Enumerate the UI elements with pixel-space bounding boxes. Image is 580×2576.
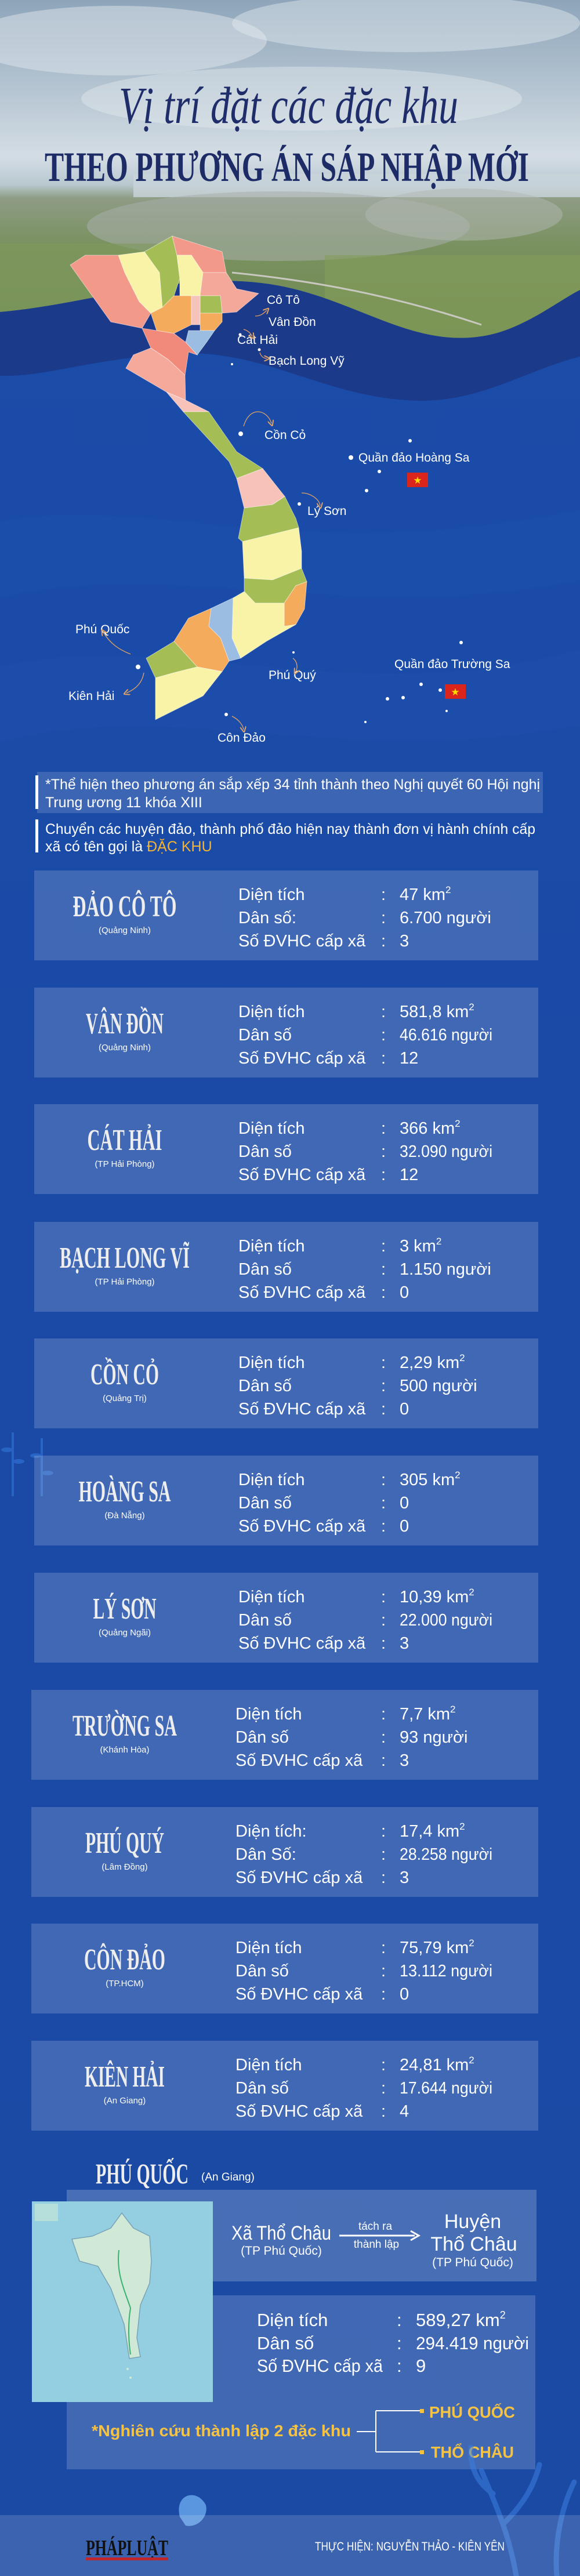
card: Cồn Cỏ: Diện tích — [238, 1354, 304, 1372]
card: Vân Đồn: : — [381, 1049, 386, 1068]
card: Lý Sơn: (Quảng Ngãi) — [99, 1628, 151, 1638]
decoration: coral left — [1, 1432, 53, 1496]
card: Bạch Long Vĩ: (TP Hải Phòng) — [95, 1277, 155, 1287]
card: Lý Sơn: LÝ SƠN — [93, 1592, 157, 1626]
Phú Quốc stats box: 2 — [500, 2309, 506, 2321]
Phú Quốc transfer box: Thổ Châu — [430, 2233, 517, 2255]
card: Kiên Hải: 17.644 người — [400, 2079, 492, 2098]
card: Côn Đảo: Dân số — [235, 1962, 289, 1980]
card: Trường Sa: : — [381, 1751, 386, 1770]
card: Hoàng Sa: (Đà Nẵng) — [104, 1511, 145, 1521]
Phú Quốc stats box: Diện tích — [257, 2310, 328, 2330]
logo: Pháp Luật — [86, 2536, 168, 2560]
card: Kiên Hải: (An Giang) — [104, 2096, 146, 2106]
footer band — [0, 2515, 580, 2576]
card: Côn Đảo: Số ĐVHC cấp xã — [235, 1985, 363, 2004]
callout: research 2 special zones: PHÚ QUỐC — [429, 2403, 515, 2421]
card: Cát Hải: 2 — [455, 1118, 461, 1129]
card: Cồn Cỏ: CỒN CỎ — [90, 1356, 159, 1391]
card: Hoàng Sa: HOÀNG SA — [79, 1475, 171, 1508]
islands — [136, 333, 463, 723]
Phú Quốc transfer box: (TP Phú Quốc) — [432, 2256, 513, 2269]
map labels: Kiên Hải — [68, 690, 114, 703]
card: Bạch Long Vĩ: 3 km — [400, 1237, 436, 1256]
card: Bạch Long Vĩ: BẠCH LONG VĨ — [60, 1241, 190, 1275]
card: Bạch Long Vĩ: 2 — [436, 1236, 441, 1247]
card: Phú Quý: 3 — [400, 1868, 409, 1887]
card: Hoàng Sa: 0 — [400, 1494, 409, 1512]
card: Bạch Long Vĩ: Dân số — [238, 1260, 292, 1279]
card: Côn Đảo — [31, 1924, 538, 2013]
card: Đảo Cô Tô: 6.700 người — [400, 909, 491, 927]
card: Đảo Cô Tô: Dân số: — [238, 909, 296, 927]
card: Bạch Long Vĩ: 1.150 người — [400, 1260, 491, 1279]
card: Phú Quý: Dân Số: — [235, 1845, 296, 1864]
Phú Quốc transfer box: Xã Thổ Châu — [231, 2222, 331, 2244]
card: Bạch Long Vĩ: Số ĐVHC cấp xã — [238, 1283, 366, 1302]
card: Hoàng Sa: Dân số — [238, 1494, 292, 1512]
callout: research 2 special zones — [92, 2403, 515, 2461]
card: Kiên Hải: 24,81 km — [400, 2056, 469, 2074]
card: Đảo Cô Tô: : — [381, 932, 386, 950]
map labels: Lý Sơn — [307, 505, 346, 518]
card: Trường Sa: TRƯỜNG SA — [72, 1709, 177, 1743]
card: Lý Sơn: 3 — [400, 1634, 409, 1653]
card: Phú Quý — [31, 1807, 538, 1897]
card: Cồn Cỏ: : — [381, 1377, 386, 1395]
card: Cồn Cỏ — [34, 1338, 538, 1428]
Phú Quốc heading: (An Giang) — [201, 2171, 255, 2183]
card: Phú Quý: : — [381, 1868, 386, 1887]
card: Kiên Hải — [31, 2041, 538, 2131]
Phú Quốc transfer box — [67, 2190, 536, 2281]
note 2: xã có tên gọi là ĐẶC KHU — [45, 838, 212, 855]
map labels: Phú Quý — [269, 669, 316, 682]
map labels: Quần đảo Hoàng Sa — [358, 451, 470, 465]
Phú Quốc transfer box: tách ra — [358, 2221, 392, 2233]
card: Trường Sa: Số ĐVHC cấp xã — [235, 1751, 363, 1770]
note 1: Trung ương 11 khóa XIII — [45, 794, 202, 811]
card: Bạch Long Vĩ — [34, 1222, 538, 1312]
Phú Quốc transfer box: thành lập — [354, 2238, 399, 2251]
Phú Quốc transfer box: Huyện — [444, 2211, 501, 2233]
card: Vân Đồn: 581,8 km — [400, 1003, 469, 1021]
card: Đảo Cô Tô — [34, 870, 538, 960]
card: Lý Sơn: : — [381, 1611, 386, 1630]
card: Phú Quý: Số ĐVHC cấp xã — [235, 1868, 363, 1887]
decoration: shell — [179, 2495, 206, 2526]
logo: Pháp Luật: PHÁPLUẬT — [86, 2536, 168, 2560]
card: Cát Hải: : — [381, 1166, 386, 1184]
card: Trường Sa: Diện tích — [235, 1705, 302, 1724]
card: Phú Quý: Diện tích: — [235, 1822, 306, 1841]
card: Bạch Long Vĩ: : — [381, 1283, 386, 1302]
card: Côn Đảo: : — [381, 1939, 386, 1957]
card: Kiên Hải: : — [381, 2056, 386, 2074]
card: Côn Đảo: 0 — [400, 1985, 409, 2004]
card: Đảo Cô Tô: Số ĐVHC cấp xã — [238, 932, 366, 950]
card: Vân Đồn: Diện tích — [238, 1003, 304, 1021]
card: Cát Hải: 12 — [400, 1166, 418, 1184]
card: Côn Đảo: 2 — [469, 1938, 474, 1949]
Phú Quốc stats box: 294.419 người — [416, 2333, 529, 2353]
card: Cồn Cỏ: 500 người — [400, 1377, 477, 1395]
map labels: Bạch Long Vỹ — [269, 354, 345, 368]
card: Kiên Hải: : — [381, 2079, 386, 2098]
Phú Quốc stats box: Số ĐVHC cấp xã — [257, 2356, 383, 2376]
card: Phú Quý: : — [381, 1822, 386, 1841]
note 1: *Thể hiện theo phương án sắp xếp 34 tỉnh thành theo Nghị quyết 60 Hội nghị — [45, 776, 540, 793]
card: Đảo Cô Tô: ĐẢO CÔ TÔ — [73, 890, 176, 923]
card: Phú Quý: 17,4 km — [400, 1822, 459, 1841]
decoration: coral right bottom — [471, 2447, 574, 2576]
card: Côn Đảo: (TP.HCM) — [106, 1979, 144, 1989]
card: Cồn Cỏ: : — [381, 1354, 386, 1372]
card: Kiên Hải: : — [381, 2102, 386, 2121]
Phú Quốc transfer box: (TP Phú Quốc) — [241, 2244, 322, 2258]
card: Lý Sơn: : — [381, 1634, 386, 1653]
card: Kiên Hải: 4 — [400, 2102, 409, 2121]
card: Kiên Hải: Diện tích — [235, 2056, 302, 2074]
card: Cồn Cỏ: (Quảng Trị) — [103, 1394, 147, 1403]
card: Kiên Hải: KIÊN HẢI — [85, 2060, 165, 2094]
card: Đảo Cô Tô: Diện tích — [238, 886, 304, 904]
map labels — [68, 293, 510, 745]
title — [45, 77, 529, 190]
card: Hoàng Sa: : — [381, 1471, 386, 1489]
card: Côn Đảo: : — [381, 1985, 386, 2004]
card: Côn Đảo: CÔN ĐẢO — [84, 1943, 165, 1976]
card: Vân Đồn: : — [381, 1026, 386, 1044]
map labels: Cát Hải — [237, 333, 278, 347]
card: Bạch Long Vĩ: 0 — [400, 1283, 409, 1302]
card: Hoàng Sa: : — [381, 1517, 386, 1536]
card: Lý Sơn: : — [381, 1588, 386, 1606]
card: Cồn Cỏ: Dân số — [238, 1377, 292, 1395]
card: Kiên Hải: Số ĐVHC cấp xã — [235, 2102, 363, 2121]
card: Bạch Long Vĩ: : — [381, 1237, 386, 1256]
map labels: Cô Tô — [267, 293, 300, 307]
card: Lý Sơn: Diện tích — [238, 1588, 304, 1606]
callout: research 2 special zones: THỔ CHÂU — [431, 2443, 514, 2461]
card: Côn Đảo: Diện tích — [235, 1939, 302, 1957]
card: Phú Quý: 2 — [459, 1821, 465, 1832]
Phú Quốc stats box: : — [397, 2333, 402, 2353]
card: Hoàng Sa: 2 — [455, 1470, 461, 1481]
map labels: Côn Đảo — [217, 731, 266, 745]
Phú Quốc stats box: 589,27 km — [416, 2310, 500, 2330]
card: Kiên Hải: Dân số — [235, 2079, 289, 2098]
card: Côn Đảo: 13.112 người — [400, 1962, 492, 1980]
card: Côn Đảo: : — [381, 1962, 386, 1980]
callout: research 2 special zones: *Nghiên cứu thành lập 2 đặc khu — [92, 2422, 351, 2440]
card: Lý Sơn: Dân số — [238, 1611, 292, 1630]
card: Vân Đồn: Số ĐVHC cấp xã — [238, 1049, 366, 1068]
card: Vân Đồn: : — [381, 1003, 386, 1021]
card: Vân Đồn: (Quảng Ninh) — [99, 1043, 151, 1053]
card: Lý Sơn: 10,39 km — [400, 1588, 469, 1606]
card: Cồn Cỏ: 2,29 km — [400, 1354, 459, 1372]
card: Cồn Cỏ: : — [381, 1400, 386, 1418]
Phú Quốc map — [32, 2201, 213, 2402]
card: Lý Sơn: 22.000 người — [400, 1611, 492, 1630]
card: Trường Sa: : — [381, 1705, 386, 1724]
map labels: Cồn Cỏ — [264, 429, 306, 442]
card: Đảo Cô Tô: : — [381, 909, 386, 927]
card: Cát Hải: (TP Hải Phòng) — [95, 1159, 155, 1169]
card: Trường Sa — [31, 1690, 538, 1780]
card: Phú Quý: PHÚ QUÝ — [85, 1826, 164, 1860]
Phú Quốc stats box: 9 — [416, 2356, 426, 2376]
card: Lý Sơn: Số ĐVHC cấp xã — [238, 1634, 366, 1653]
card: Cát Hải: : — [381, 1119, 386, 1138]
card: Trường Sa: 3 — [400, 1751, 409, 1770]
card: Cồn Cỏ: 0 — [400, 1400, 409, 1418]
card: Hoàng Sa — [34, 1456, 538, 1545]
map labels: Vân Đồn — [269, 315, 316, 329]
note 1 — [35, 772, 543, 813]
credits: THỰC HIỆN: NGUYỄN THẢO - KIÊN YÊN — [315, 2540, 505, 2553]
card: Cồn Cỏ: 2 — [459, 1352, 465, 1363]
card: Trường Sa: Dân số — [235, 1728, 289, 1747]
card: Trường Sa: 2 — [450, 1704, 456, 1715]
navy wave — [0, 281, 580, 401]
card: Cát Hải: Diện tích — [238, 1119, 304, 1138]
map: Vietnam provinces — [70, 236, 307, 720]
card: Kiên Hải: 2 — [469, 2055, 474, 2066]
card: Hoàng Sa: Số ĐVHC cấp xã — [238, 1517, 366, 1536]
card: Bạch Long Vĩ: : — [381, 1260, 386, 1279]
card: Cát Hải: CÁT HẢI — [87, 1123, 162, 1157]
flags — [407, 473, 466, 699]
Phú Quốc stats box: Dân số — [257, 2333, 314, 2353]
Phú Quốc stats box: : — [397, 2310, 402, 2330]
map labels: Phú Quốc — [75, 623, 129, 636]
card: Vân Đồn — [34, 988, 538, 1077]
card: Hoàng Sa: 305 km — [400, 1471, 455, 1489]
card: Trường Sa: (Khánh Hòa) — [100, 1745, 150, 1755]
arrows — [103, 310, 320, 730]
card: Cát Hải: : — [381, 1142, 386, 1161]
card: Cồn Cỏ: Số ĐVHC cấp xã — [238, 1400, 366, 1418]
card: Phú Quý: 28.258 người — [400, 1845, 492, 1864]
card: Vân Đồn: 46.616 người — [400, 1026, 492, 1044]
card: Đảo Cô Tô: : — [381, 886, 386, 904]
card: Lý Sơn: 2 — [469, 1587, 474, 1598]
card: Đảo Cô Tô: (Quảng Ninh) — [99, 926, 151, 935]
card: Vân Đồn: Dân số — [238, 1026, 292, 1044]
card: Bạch Long Vĩ: Diện tích — [238, 1237, 304, 1256]
card: Cát Hải: Dân số — [238, 1142, 292, 1161]
Phú Quốc heading: PHÚ QUỐC — [96, 2157, 188, 2190]
Phú Quốc stats box — [67, 2295, 535, 2469]
card: Cát Hải — [34, 1104, 538, 1194]
card: Trường Sa: : — [381, 1728, 386, 1747]
card: Vân Đồn: 2 — [469, 1002, 474, 1013]
header photo — [0, 0, 580, 348]
card: Hoàng Sa: : — [381, 1494, 386, 1512]
card: Đảo Cô Tô: 2 — [445, 884, 451, 895]
card: Cát Hải: 366 km — [400, 1119, 455, 1138]
card: Lý Sơn — [34, 1573, 538, 1663]
note 2: Chuyển các huyện đảo, thành phố đảo hiện nay thành đơn vị hành chính cấp — [45, 821, 535, 837]
card: Trường Sa: 7,7 km — [400, 1705, 450, 1724]
Phú Quốc stats box: : — [397, 2356, 402, 2376]
card: Hoàng Sa: Diện tích — [238, 1471, 304, 1489]
flags: ★ — [413, 475, 422, 486]
card: Đảo Cô Tô: 3 — [400, 932, 409, 950]
flags: ★ — [451, 687, 460, 698]
card: Vân Đồn: 12 — [400, 1049, 418, 1068]
card: Phú Quý: (Lâm Đồng) — [102, 1862, 148, 1872]
card: Trường Sa: 93 người — [400, 1728, 467, 1747]
card: Đảo Cô Tô: 47 km — [400, 886, 445, 904]
card: Vân Đồn: VÂN ĐỒN — [86, 1006, 164, 1040]
card: Côn Đảo: 75,79 km — [400, 1939, 469, 1957]
map labels: Quần đảo Trường Sa — [394, 658, 510, 671]
card: Phú Quý: : — [381, 1845, 386, 1864]
card: Cát Hải: 32.090 người — [400, 1142, 492, 1161]
note 2 — [35, 819, 535, 855]
card: Cát Hải: Số ĐVHC cấp xã — [238, 1166, 366, 1184]
card: Hoàng Sa: 0 — [400, 1517, 409, 1536]
title: Vị trí đặt các đặc khu — [119, 77, 458, 135]
